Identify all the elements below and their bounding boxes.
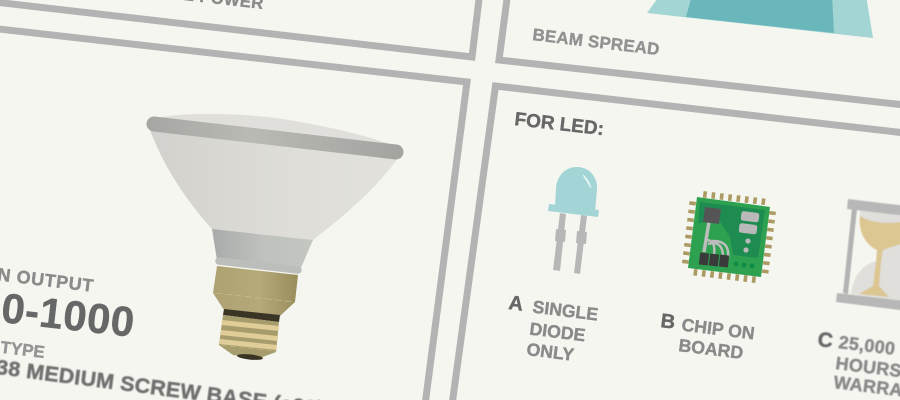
option B text: CHIP ON [681, 315, 756, 343]
diode flange [548, 204, 599, 217]
chip traces [704, 222, 728, 258]
contact tip [237, 353, 263, 361]
thread stripes [220, 320, 279, 350]
posts [843, 208, 857, 294]
option B text [678, 315, 756, 363]
option C text: 25,000 [838, 332, 896, 359]
bulb rim [154, 124, 396, 152]
diode dome [555, 167, 597, 212]
chip pins [681, 190, 777, 284]
chart: beam spread cone [647, 0, 873, 38]
option C letter: C [816, 328, 834, 353]
outer beam [647, 0, 873, 38]
chip dots [734, 262, 754, 268]
chip pads [739, 211, 760, 253]
bulb lens [150, 114, 398, 158]
panel: top right frame [499, 0, 900, 105]
option A text: DIODE [529, 319, 587, 345]
sand top [859, 216, 900, 297]
option A text [526, 297, 600, 365]
bulb collar [219, 261, 298, 270]
heading: for LED: FOR LED: [513, 109, 605, 140]
panel: bulb frame [0, 28, 467, 400]
bottom bar [836, 293, 900, 312]
screw thread [219, 315, 279, 358]
option B letter: B [659, 310, 676, 334]
dark collar [223, 309, 280, 322]
chip board [688, 197, 770, 277]
label: beam spread: BEAM SPREAD [532, 25, 661, 59]
icon: single diode [548, 167, 599, 274]
glass [851, 211, 900, 302]
value: lumen range: 0-1000 [0, 284, 137, 346]
option A text: ONLY [526, 339, 575, 365]
diode highlight [583, 175, 591, 188]
thread seam [221, 345, 276, 351]
option A letter: A [507, 292, 524, 316]
panel: top left frame [0, 0, 480, 57]
bulb reflector [150, 130, 398, 240]
option A text: SINGLE [532, 297, 600, 325]
icon: hourglass warranty [836, 199, 900, 312]
brass base [213, 266, 298, 316]
top bar [847, 199, 900, 217]
bulb neck [212, 229, 313, 270]
diode legs [553, 213, 587, 274]
inner beam [686, 0, 834, 33]
icon: chip on board [681, 190, 777, 284]
brass seam [215, 293, 294, 302]
option C text [833, 332, 900, 400]
chip square [703, 207, 721, 224]
chip black blocks [699, 252, 729, 268]
panel: LED frame [452, 86, 900, 400]
option B text: BOARD [678, 335, 745, 363]
thread body [219, 315, 279, 358]
icon: PAR38 bulb [150, 114, 398, 361]
chip dark region [698, 202, 765, 258]
